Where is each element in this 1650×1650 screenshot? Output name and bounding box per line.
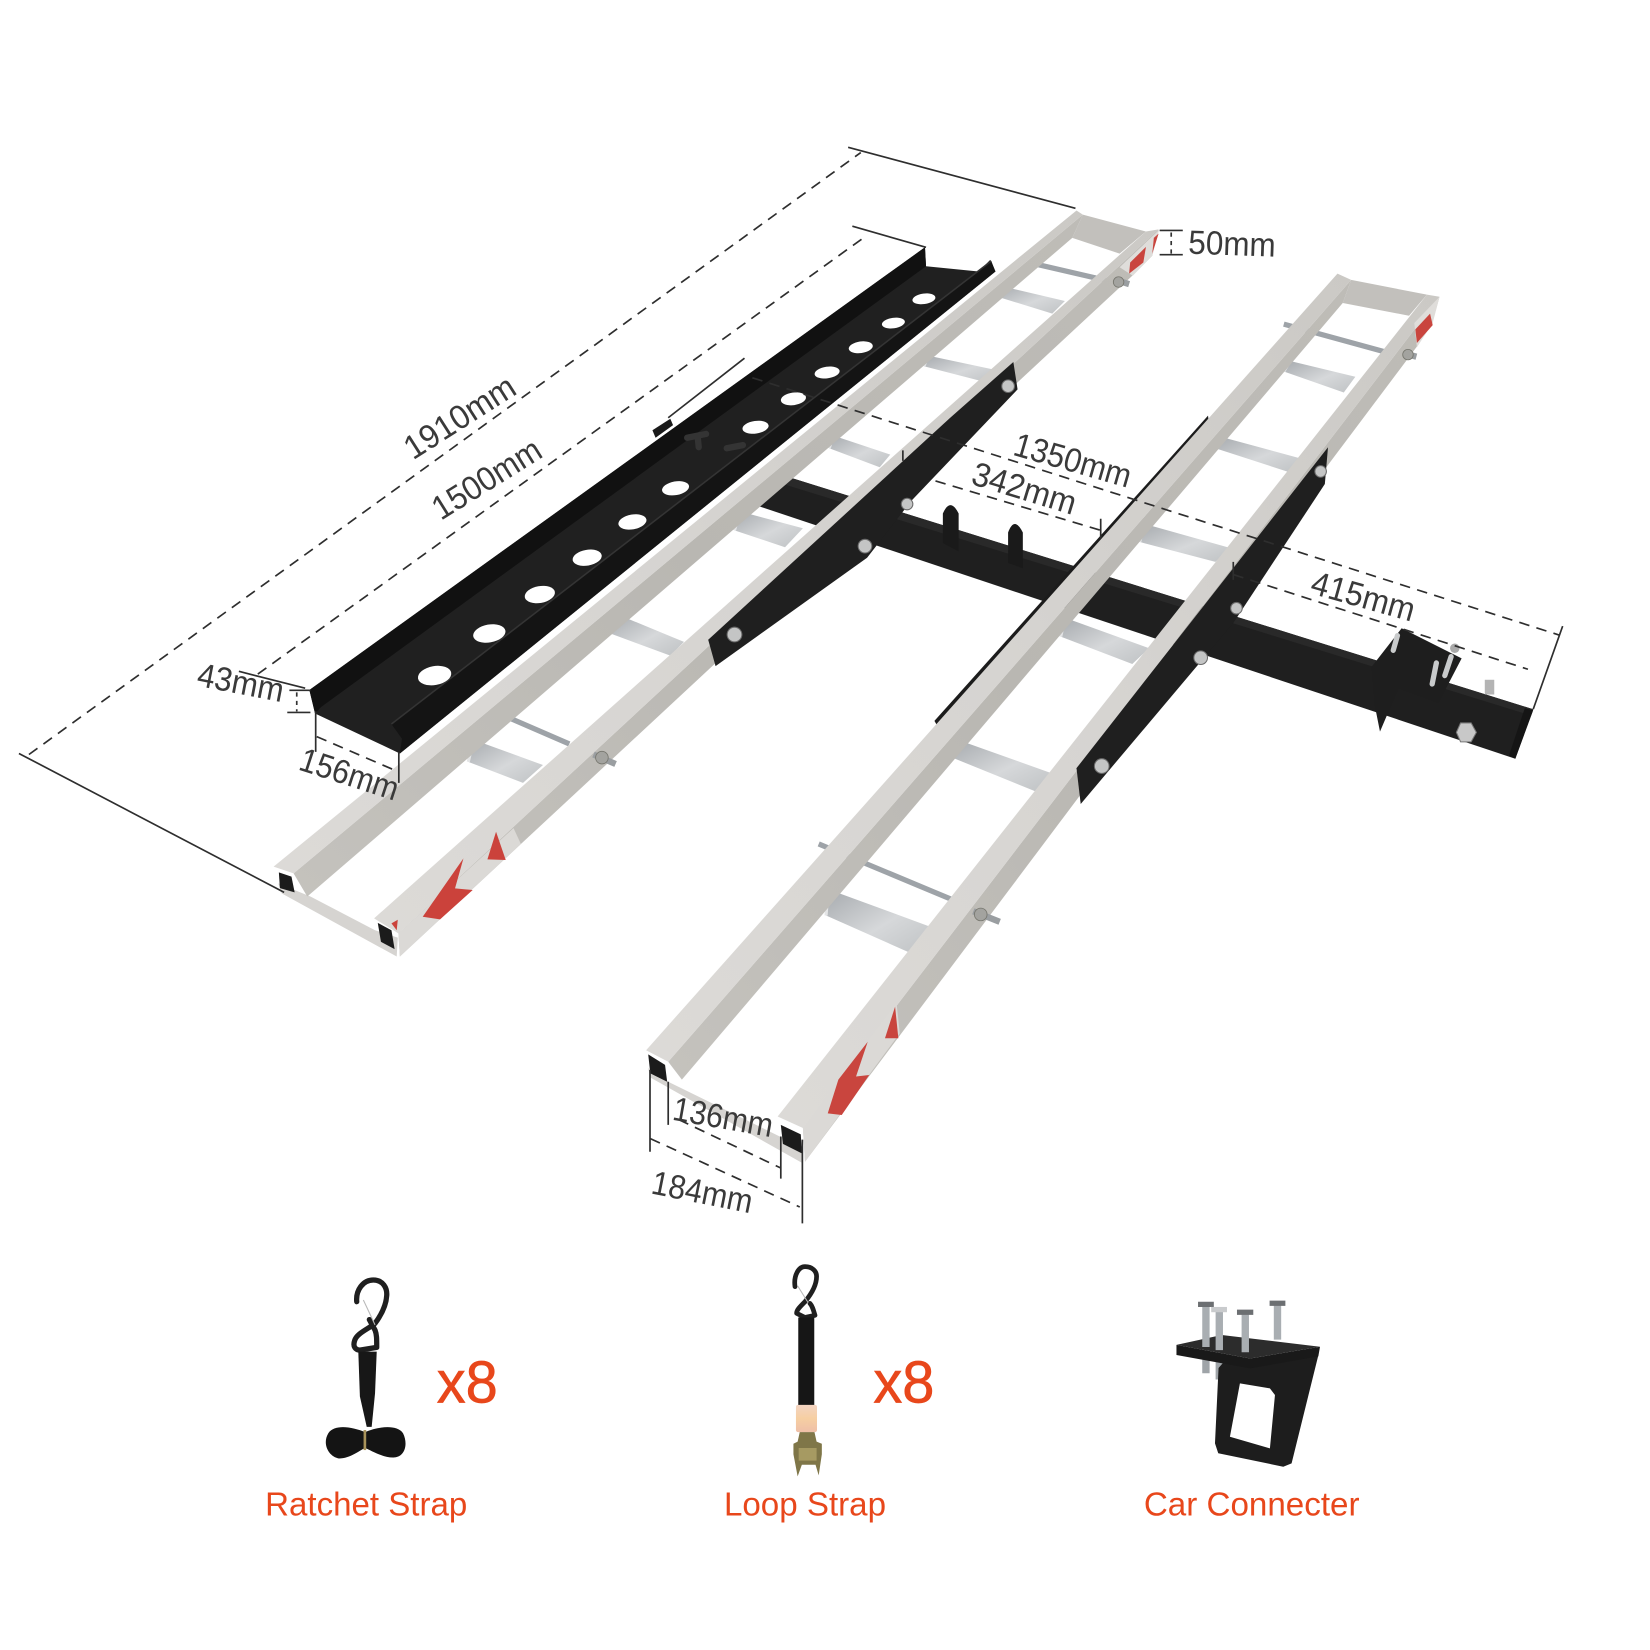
left ramp right rail	[374, 229, 1159, 957]
right ramp cross bars	[819, 324, 1391, 953]
dimension label: 342mm: 342mm	[967, 456, 1081, 523]
dimension label: 156mm: 156mm	[295, 742, 403, 808]
panel: right ramp	[646, 274, 1440, 1163]
dimension label: 415mm: 415mm	[1307, 565, 1419, 629]
right ramp end plates	[648, 280, 1427, 1163]
hitch clamp	[1372, 628, 1494, 742]
label: car connector: Car Connecter	[1144, 1486, 1360, 1523]
left ramp nuts	[593, 277, 1129, 764]
label: ratchet strap: Ratchet Strap	[265, 1486, 467, 1523]
icon: channel wing bolts	[687, 434, 743, 448]
left ramp brace plate	[708, 362, 1018, 666]
multiplier: loop strap x8: x8	[873, 1351, 934, 1416]
dimension label: 50mm: 50mm	[1188, 225, 1276, 265]
icon: car connector	[1176, 1303, 1320, 1467]
dimension label: 184mm: 184mm	[648, 1165, 756, 1221]
icon: red reflective chevrons	[803, 297, 1440, 1162]
hitch receiver bar	[749, 476, 1533, 759]
right ramp brace plate	[1076, 447, 1328, 804]
left ramp end plates	[278, 215, 1146, 957]
dimension label: 136mm: 136mm	[670, 1091, 776, 1145]
channel holes	[416, 292, 936, 688]
right ramp right rail	[778, 295, 1440, 1162]
label: loop strap: Loop Strap	[724, 1486, 886, 1523]
panel: black wheel channel	[309, 247, 995, 753]
panel: left ramp	[274, 210, 1159, 957]
icon: hitch lugs	[943, 505, 1023, 568]
icon: loop strap	[793, 1267, 822, 1476]
dimension label: 43mm: 43mm	[194, 657, 287, 710]
dimension label: 1350mm: 1350mm	[1010, 427, 1136, 495]
dimension label: 1500mm: 1500mm	[426, 432, 549, 528]
right ramp left rail	[646, 274, 1351, 1082]
dimension label: 1910mm: 1910mm	[397, 369, 523, 467]
right ramp side plate	[934, 416, 1209, 728]
left ramp left rail	[274, 210, 1083, 897]
icon: ratchet strap	[326, 1280, 406, 1458]
icon: red reflective chevrons	[391, 230, 1159, 957]
multiplier: ratchet strap x8: x8	[437, 1351, 498, 1416]
left ramp cross bars	[468, 263, 1113, 783]
dimension lines	[19, 147, 1563, 1223]
right ramp nuts	[973, 349, 1416, 922]
